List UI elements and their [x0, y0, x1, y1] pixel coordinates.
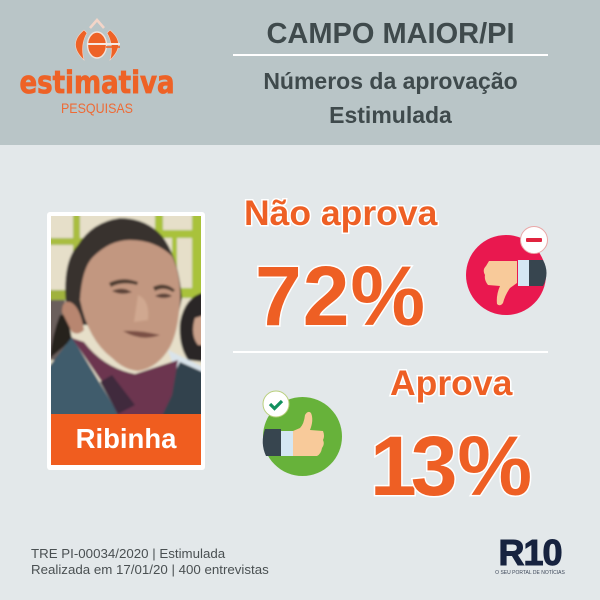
icon: thumbs down — [466, 226, 548, 315]
footer note: Realizada em 17/01/20 | 400 entrevistas — [31, 562, 269, 577]
icon: thumbs up — [262, 390, 342, 476]
value: 72%: 72% — [255, 249, 426, 343]
header band — [0, 0, 600, 145]
logo: estimativa pesquisas — [20, 18, 174, 116]
candidate card — [47, 212, 205, 470]
icon: logo mark — [76, 20, 120, 60]
candidate photo — [51, 216, 201, 414]
logo: R10 — [495, 532, 565, 576]
label: não aprova: Não aprova — [244, 193, 437, 233]
subtitle: Estimulada — [329, 102, 452, 128]
value: 13%: 13% — [370, 419, 532, 513]
logo wordmark: estimativa — [20, 65, 174, 101]
logo subtitle: PESQUISAS — [61, 100, 133, 116]
footer note — [31, 546, 269, 577]
header divider — [233, 54, 548, 56]
footer note: TRE PI-00034/2020 | Estimulada — [31, 546, 225, 561]
R10 tagline: O SEU PORTAL DE NOTÍCIAS — [495, 570, 565, 576]
title: city: CAMPO MAIOR/PI — [266, 18, 515, 50]
R10 wordmark: R10 — [498, 532, 562, 573]
name banner: Ribinha — [76, 423, 176, 454]
name banner — [51, 414, 201, 465]
subtitle: Números da aprovação — [263, 68, 518, 94]
divider — [233, 351, 548, 353]
subtitle — [263, 68, 518, 128]
label: aprova: Aprova — [390, 363, 512, 403]
